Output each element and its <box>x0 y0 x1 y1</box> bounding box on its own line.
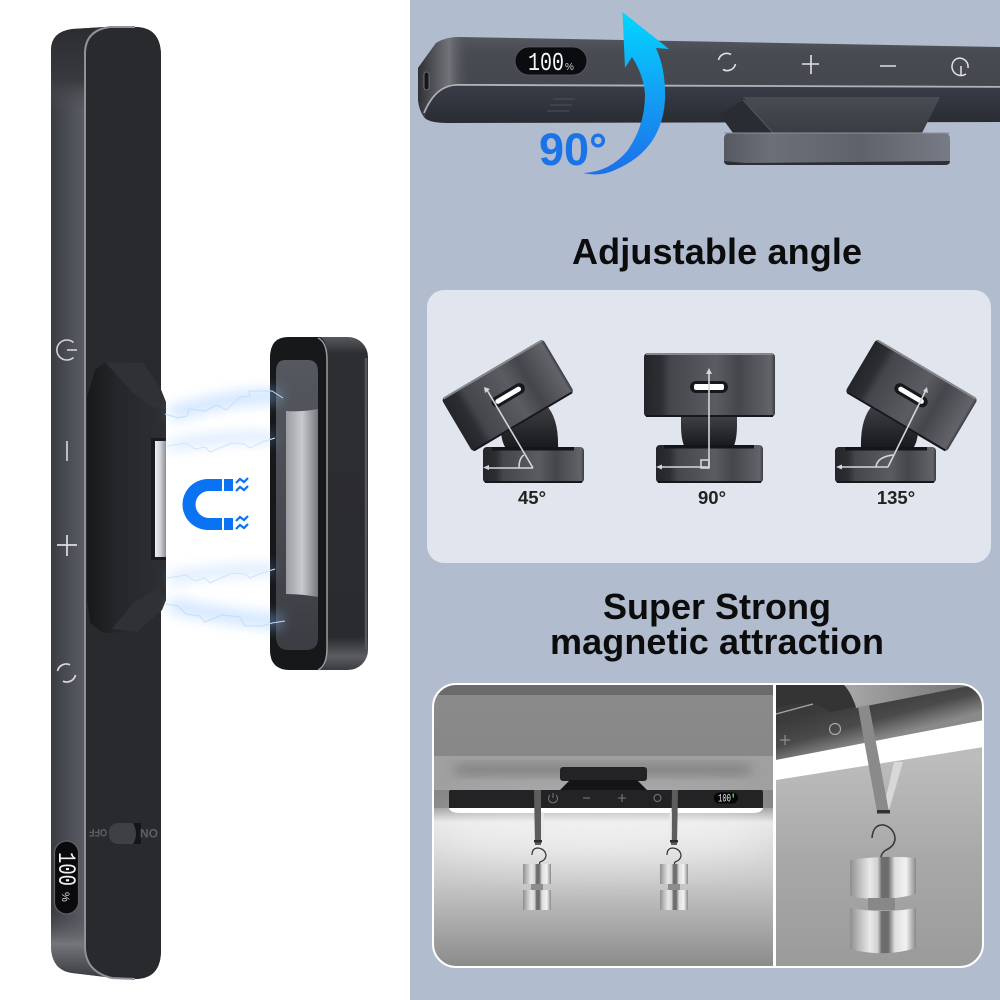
battery display: 100 <box>718 794 731 806</box>
metal strip <box>286 409 318 597</box>
slide switch: OFF / ON: OFF <box>89 826 107 838</box>
icon: minus button <box>66 441 68 461</box>
product: bar seen from the front, with rotating mount <box>418 37 1000 165</box>
battery display: 100% <box>51 841 80 914</box>
icon: plus <box>780 735 790 745</box>
mount <box>560 767 647 781</box>
magnetic field glow and sparks <box>165 391 285 626</box>
straps <box>534 790 541 845</box>
icon: minus button <box>583 798 590 799</box>
light strip <box>776 720 984 780</box>
mount arm <box>743 97 940 133</box>
angle lines <box>486 390 533 468</box>
straps <box>886 762 903 810</box>
icon: refresh <box>830 724 840 734</box>
hooks <box>532 848 546 865</box>
product: vertical light bar <box>51 27 161 979</box>
heading: Adjustable angle: Adjustable angle <box>572 231 862 272</box>
faint marks <box>547 99 575 111</box>
panel: angle options <box>427 290 991 563</box>
USB port <box>424 72 429 90</box>
inner recess <box>276 360 318 650</box>
icon: power button <box>57 340 77 360</box>
device: 90 degrees <box>644 353 775 483</box>
battery display: 100%: 100 <box>51 852 80 886</box>
arrow: 90 degree rotation <box>583 12 669 174</box>
mount base <box>724 133 950 165</box>
slide switch: OFF / ON <box>89 823 158 844</box>
slide switch: OFF / ON: ON <box>140 826 158 840</box>
angle lines <box>659 372 709 468</box>
hook <box>872 825 895 858</box>
mount top facet <box>105 362 166 408</box>
metal plate <box>155 441 166 557</box>
weights <box>523 864 551 884</box>
icon: minus button <box>880 65 896 67</box>
battery display: 100% <box>515 47 587 78</box>
battery display: 100%: % <box>59 892 71 902</box>
angle lines <box>840 390 926 467</box>
product: detached magnetic base <box>270 337 368 670</box>
photo: close-up view <box>776 684 984 968</box>
icon: circle button <box>654 794 661 802</box>
heading: Super Strong magnetic attraction: magnetic attraction <box>550 621 884 662</box>
icon: refresh button <box>718 53 736 71</box>
device: 135 degrees <box>835 339 978 483</box>
weight <box>850 857 916 899</box>
bar <box>449 790 763 809</box>
photo frame <box>433 684 983 967</box>
ceiling <box>856 685 968 708</box>
icon: power button <box>548 793 558 803</box>
lower face <box>424 84 1000 123</box>
panel: weight test photos <box>430 684 984 968</box>
icon: blue horseshoe magnet <box>183 478 248 530</box>
icon: plus button <box>802 55 819 74</box>
background: left white panel <box>0 0 410 1000</box>
label: 135 degrees: 135° <box>877 487 915 508</box>
label: 90 degrees: 90° <box>698 487 726 508</box>
label: 90 degrees: 90° <box>539 124 607 175</box>
icon: plus button <box>57 535 77 556</box>
photo: front view <box>430 684 773 968</box>
battery display <box>714 792 738 804</box>
product: magnetic mount on bar <box>87 362 166 633</box>
mount highlight <box>776 704 813 714</box>
icon: refresh button <box>58 664 76 682</box>
divider <box>773 684 776 968</box>
icon: power button <box>952 58 968 76</box>
device: 45 degrees <box>441 339 584 483</box>
heading: Super Strong magnetic attraction <box>550 586 884 662</box>
heading: Super Strong magnetic attraction: Super Strong <box>603 586 831 627</box>
mount <box>828 685 856 712</box>
bar <box>776 684 984 760</box>
upper face <box>418 37 1000 117</box>
label: 45 degrees: 45° <box>518 487 546 508</box>
battery display: 100%: % <box>565 62 574 73</box>
battery display: 100%: 100 <box>528 48 564 78</box>
mount bottom facet <box>112 587 166 632</box>
icon: plus button <box>618 794 626 802</box>
background: right blue-grey panel <box>410 0 1000 1000</box>
